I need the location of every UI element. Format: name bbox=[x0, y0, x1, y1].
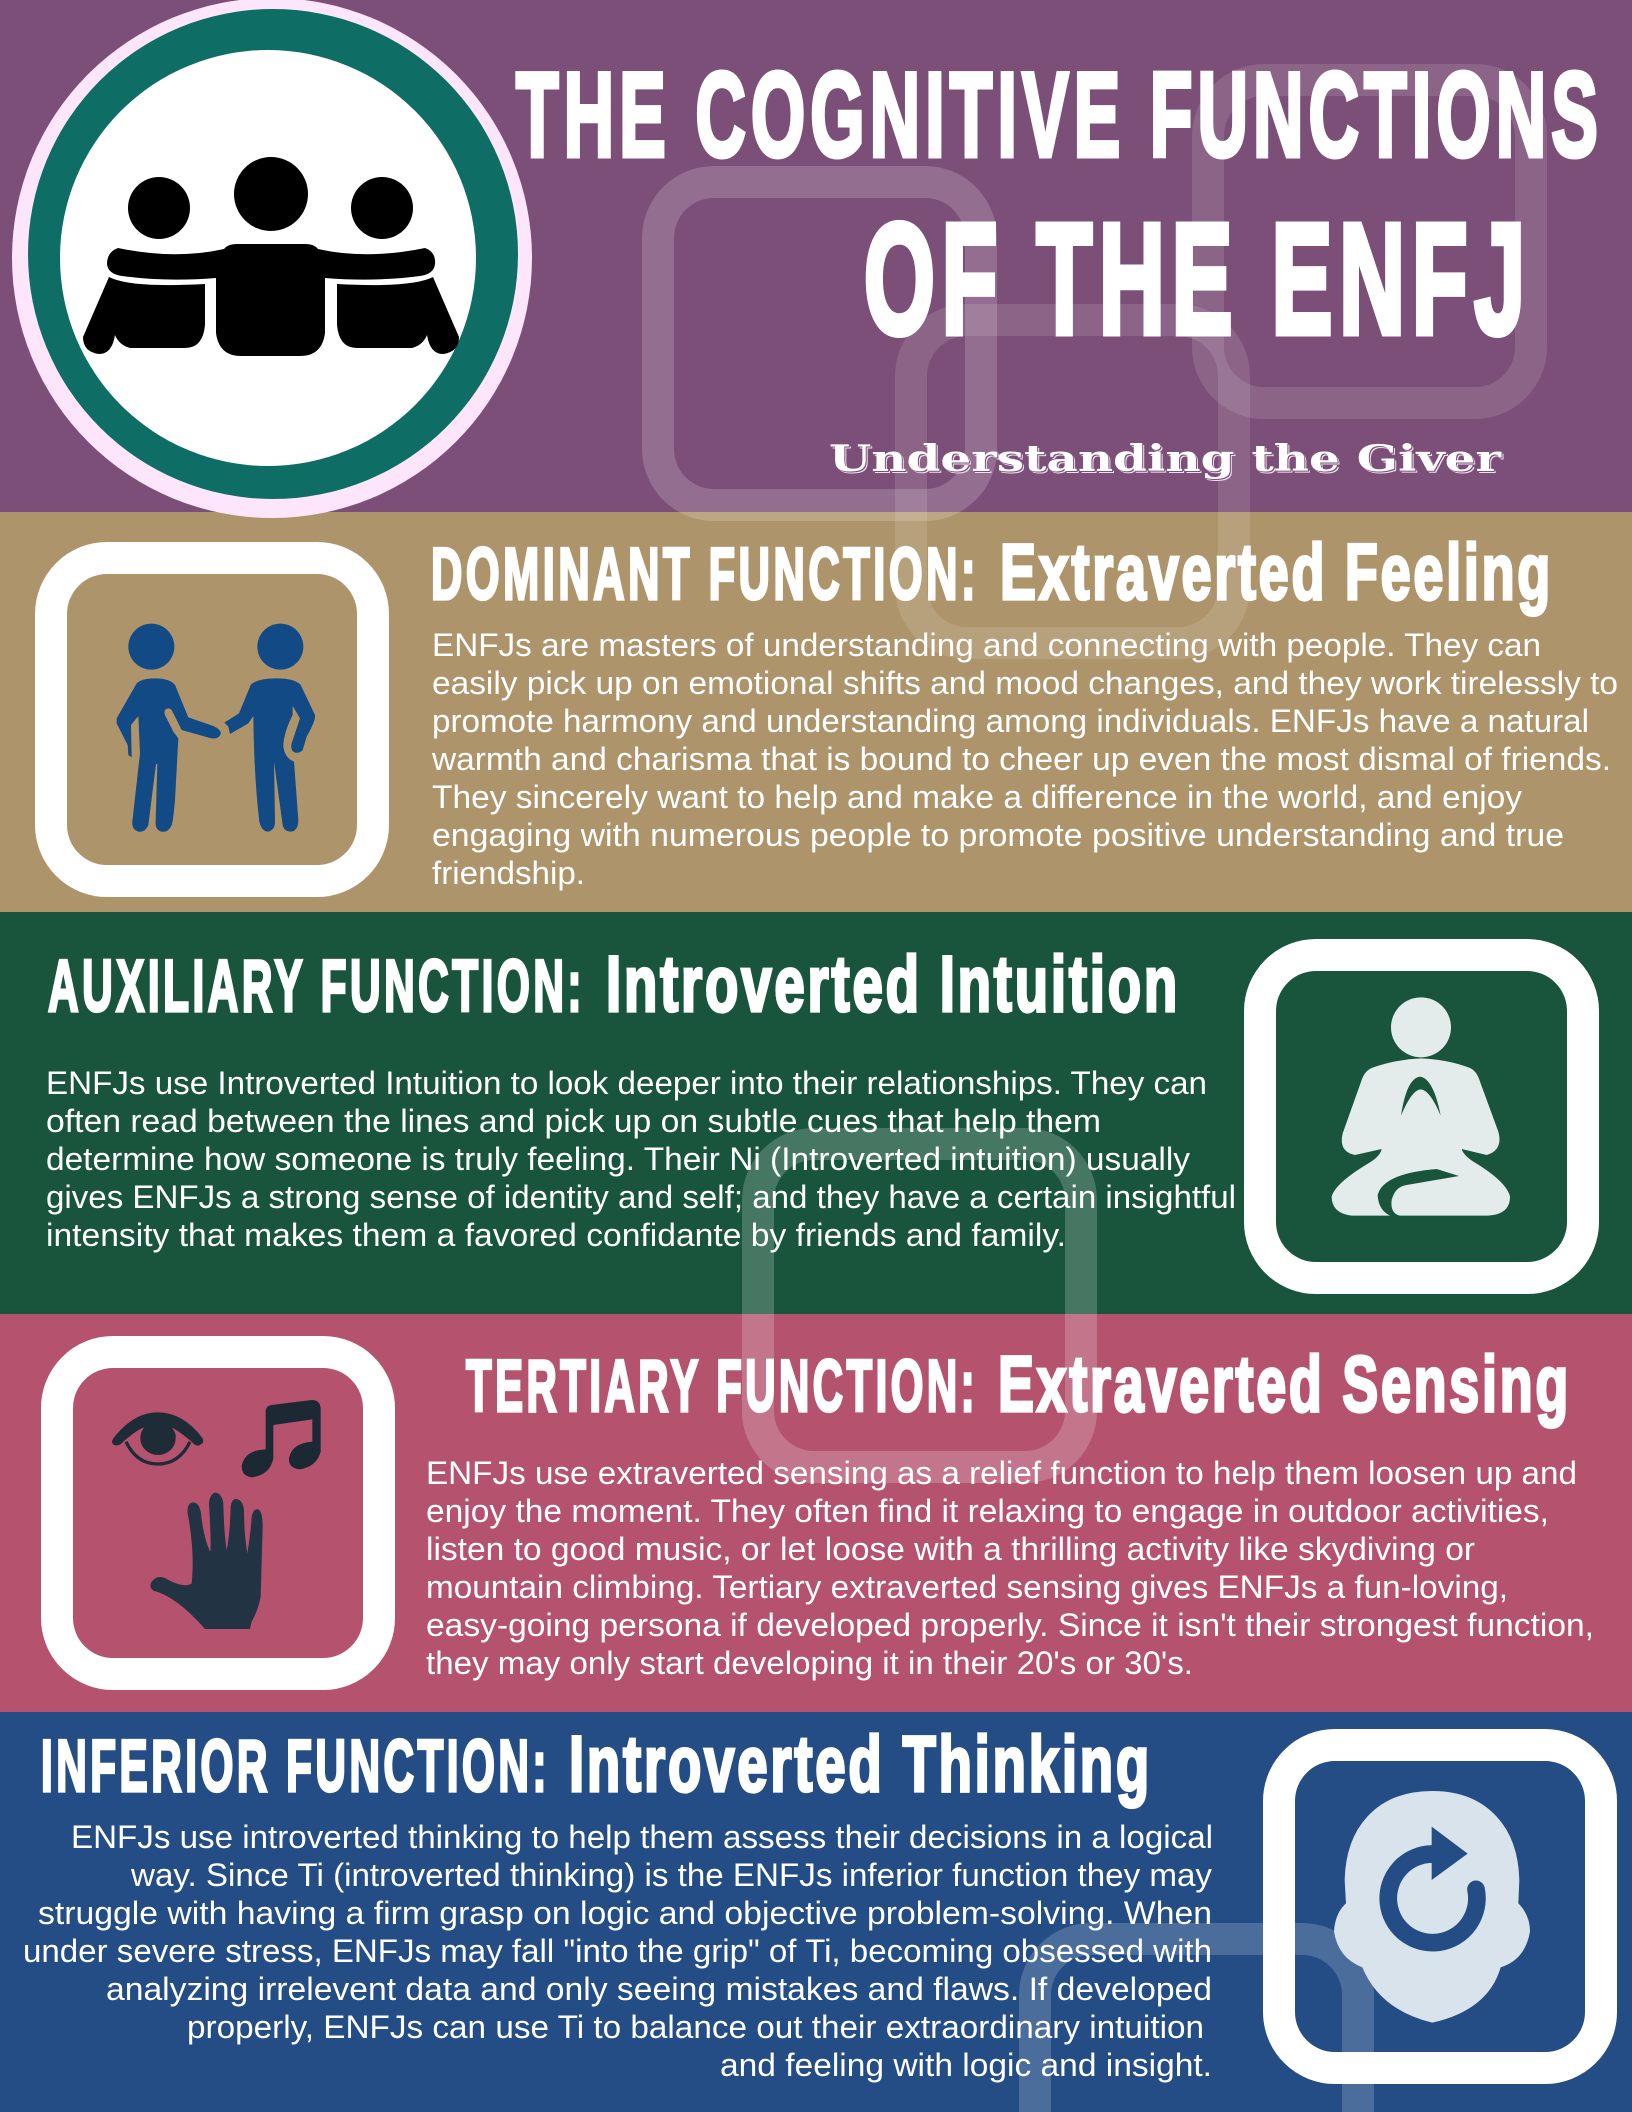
text block: auxiliary function description bbox=[46, 1065, 1236, 1253]
band: header background bbox=[0, 0, 1632, 512]
heading: inferior function: INFERIOR FUNCTION: bbox=[41, 1726, 550, 1807]
heading: auxiliary function: AUXILIARY FUNCTION: bbox=[48, 946, 585, 1027]
text block: auxiliary function description: gives ENFJs a strong sense of identity and self; and they have a certain insightful bbox=[46, 1179, 1236, 1215]
text block: inferior function description: properly, ENFJs can use Ti to balance out their extraordinary intuition bbox=[187, 2009, 1204, 2045]
text block: auxiliary function description: ENFJs use Introverted Intuition to look deeper into their relationships. They can bbox=[46, 1065, 1207, 1101]
heading: inferior function: Introverted Thinking bbox=[569, 1719, 1152, 1808]
text block: auxiliary function description: intensity that makes them a favored confidante by friends and family. bbox=[46, 1217, 1066, 1253]
text block: dominant function description: engaging with numerous people to promote positive understanding and true bbox=[432, 817, 1564, 853]
icon: group of three people in circle badge bbox=[12, 0, 532, 518]
text block: tertiary function description: mountain climbing. Tertiary extraverted sensing gives ENFJs a fun-loving, bbox=[426, 1569, 1508, 1605]
band: dominant background bbox=[0, 512, 1632, 912]
icon: meditating figure bbox=[1260, 955, 1583, 1278]
icon: head with circular arrow bbox=[1279, 1745, 1601, 2068]
text block: dominant function description: They sincerely want to help and make a difference in the world, and enjoy bbox=[432, 779, 1522, 815]
band: tertiary background bbox=[0, 1314, 1632, 1712]
text block: inferior function description: way. Since Ti (introverted thinking) is the ENFJs inferior function they may bbox=[130, 1857, 1212, 1893]
icon: eye, music note and hand bbox=[57, 1352, 379, 1674]
text block: tertiary function description: they may only start developing it in their 20's or 30's. bbox=[426, 1645, 1193, 1681]
text block: tertiary function description: ENFJs use extraverted sensing as a relief function to help them loosen up and bbox=[426, 1455, 1577, 1491]
band: inferior background bbox=[0, 1712, 1632, 2112]
text block: tertiary function description: enjoy the moment. They often find it relaxing to engage in outdoor activities, bbox=[426, 1493, 1549, 1529]
panel: header bbox=[12, 0, 1603, 518]
heading: tertiary function: TERTIARY FUNCTION: bbox=[466, 1346, 978, 1427]
title bbox=[516, 48, 1603, 367]
text block: dominant function description: friendship. bbox=[432, 855, 585, 891]
text block: inferior function description: and feeling with logic and insight. bbox=[720, 2047, 1212, 2083]
text block: auxiliary function description: determine how someone is truly feeling. Their Ni (Introverted intuition) usually bbox=[46, 1141, 1190, 1177]
panel: auxiliary function bbox=[46, 939, 1583, 1278]
heading: auxiliary function: Introverted Intuition bbox=[606, 939, 1180, 1028]
panel: dominant function bbox=[51, 527, 1618, 891]
text block: tertiary function description bbox=[426, 1455, 1594, 1681]
text block: dominant function description: ENFJs are masters of understanding and connecting with people. They can bbox=[432, 627, 1541, 663]
text block: inferior function description: analyzing irrelevent data and only seeing mistakes and flaws. If developed bbox=[106, 1971, 1212, 2007]
subtitle: Understanding the Giver bbox=[829, 438, 1502, 480]
panel: tertiary function bbox=[57, 1339, 1594, 1681]
text block: auxiliary function description: often read between the lines and pick up on subtle cues that help them bbox=[46, 1103, 1101, 1139]
band: auxiliary background bbox=[0, 912, 1632, 1314]
text block: dominant function description: easily pick up on emotional shifts and mood changes, and they work tirelessly to bbox=[432, 665, 1618, 701]
text block: inferior function description bbox=[23, 1819, 1213, 2083]
text block: tertiary function description: easy-going persona if developed properly. Since it isn't their strongest function, bbox=[426, 1607, 1594, 1643]
heading: dominant function: DOMINANT FUNCTION: bbox=[431, 534, 979, 615]
text block: dominant function description: warmth and charisma that is bound to cheer up even the most dismal of friends. bbox=[431, 741, 1611, 777]
text block: inferior function description: under severe stress, ENFJs may fall "into the grip" of Ti, becoming obsessed with bbox=[23, 1933, 1212, 1969]
text block: inferior function description: ENFJs use introverted thinking to help them assess their decisions in a logical bbox=[71, 1819, 1213, 1855]
icon: two people shaking hands bbox=[51, 558, 373, 881]
text block: dominant function description: promote harmony and understanding among individuals. ENFJs have a natural bbox=[432, 703, 1589, 739]
text block: tertiary function description: listen to good music, or let loose with a thrilling activity like skydiving or bbox=[426, 1531, 1475, 1567]
text block: inferior function description: struggle with having a firm grasp on logic and objective problem-solving. When bbox=[38, 1895, 1212, 1931]
text block: dominant function description bbox=[431, 627, 1618, 891]
panel: inferior function bbox=[23, 1719, 1601, 2083]
